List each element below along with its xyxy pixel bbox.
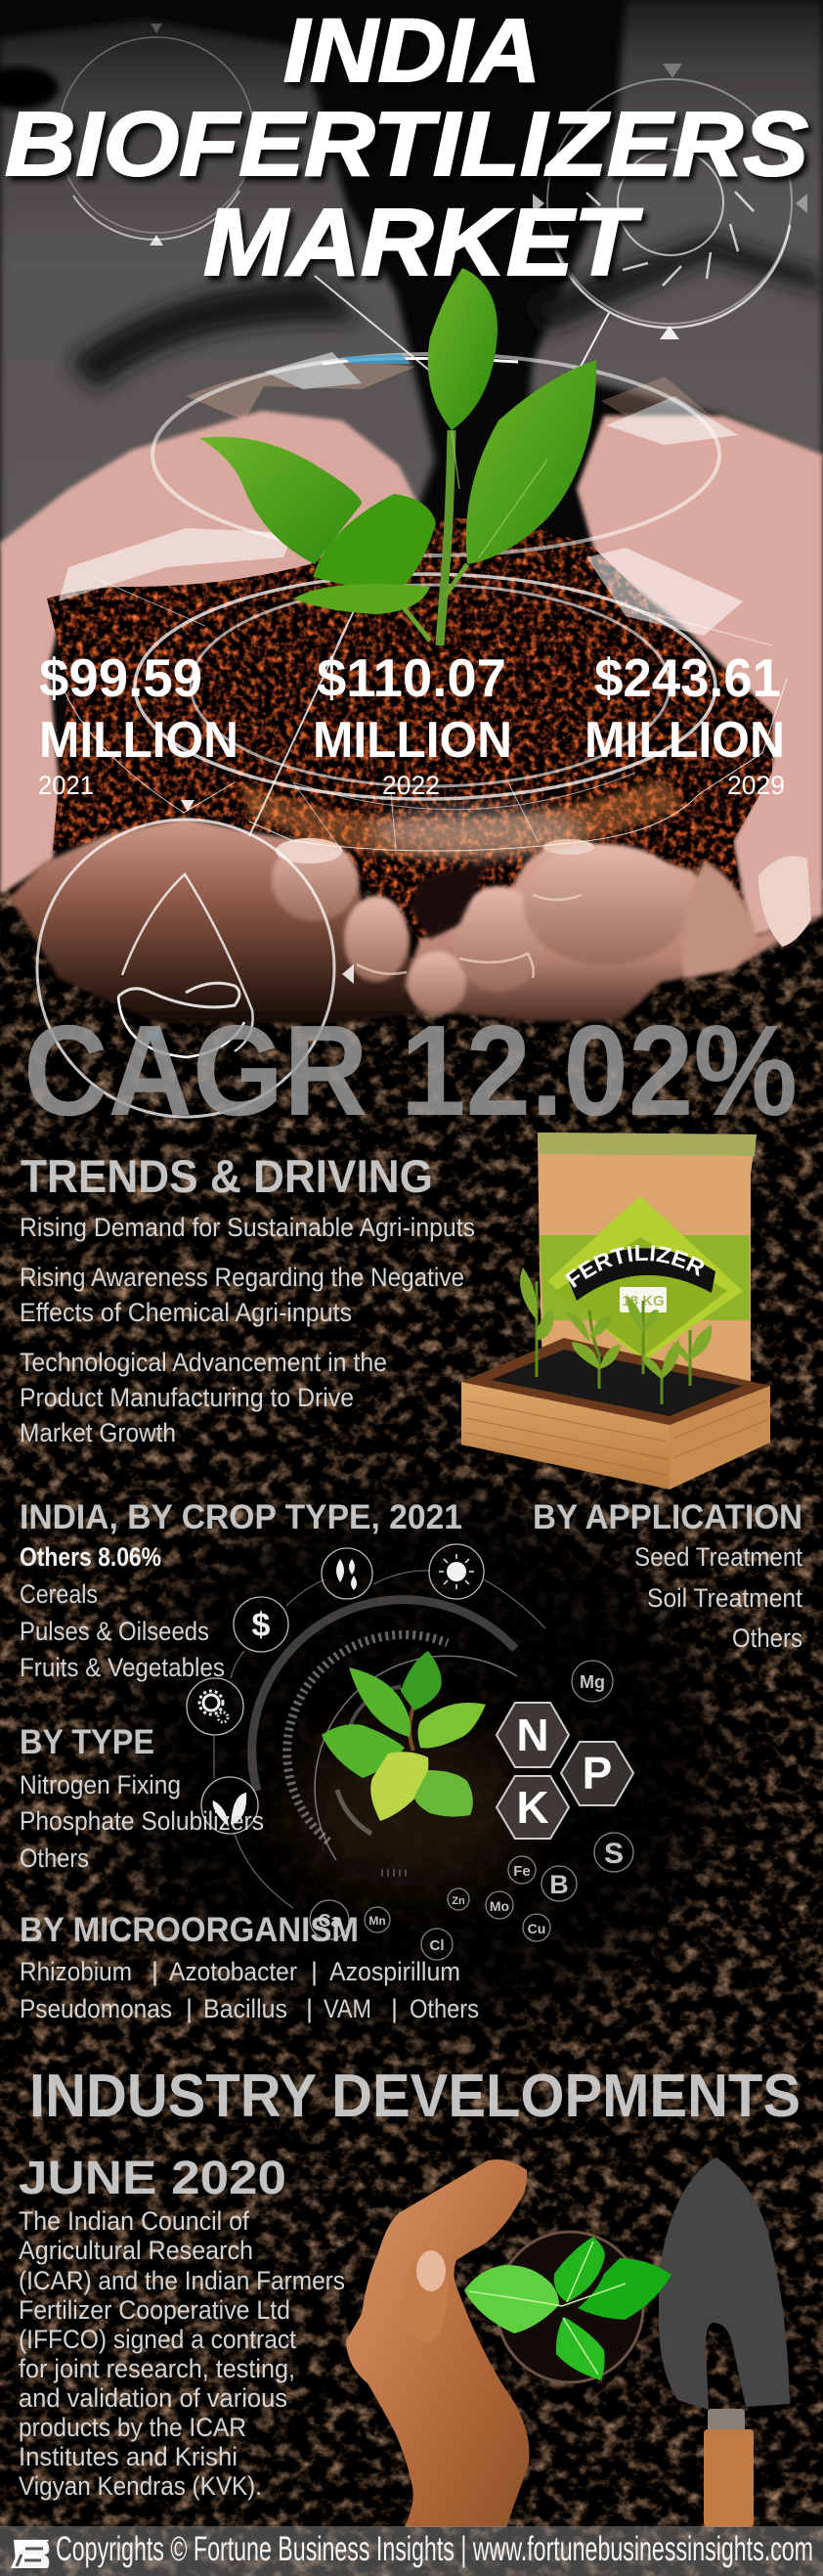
dial rings xyxy=(214,1571,545,1908)
microorganism list: Bacillus xyxy=(203,1994,287,2023)
trace element badges xyxy=(310,1661,633,1960)
trace element badges: Zn xyxy=(452,1895,465,1907)
finger lines xyxy=(357,895,582,978)
stat 2021: MILLION xyxy=(39,712,238,769)
seedling leaves xyxy=(464,2237,671,2380)
weight tag xyxy=(620,1287,667,1312)
description: (ICAR) and the Indian Farmers xyxy=(19,2266,345,2295)
drop circle xyxy=(37,820,334,1117)
panel: by application xyxy=(533,1498,802,1653)
application list xyxy=(634,1542,802,1653)
stat 2029: $243.61 xyxy=(594,647,781,708)
stat 2029: 2029 xyxy=(727,771,785,800)
type list xyxy=(20,1770,264,1873)
description: Institutes and Krishi xyxy=(19,2442,238,2471)
top right circles xyxy=(547,79,792,324)
trends list: Rising Awareness Regarding the Negative xyxy=(20,1263,464,1292)
planter xyxy=(461,1338,770,1425)
left sleeve xyxy=(0,20,435,587)
trace element badges: Fe xyxy=(513,1863,531,1880)
microorganism list: Azotobacter xyxy=(169,1957,297,1986)
title: BIOFERTILIZERS xyxy=(5,93,808,195)
fine polygon band xyxy=(59,675,787,851)
plant xyxy=(322,1651,486,1821)
finger gaps xyxy=(411,861,489,939)
crop list: Cereals xyxy=(20,1579,98,1609)
hand xyxy=(346,2159,529,2527)
trace element badges: Mg xyxy=(580,1672,605,1692)
stat 2021: $99.59 xyxy=(39,647,202,708)
title xyxy=(5,1,808,295)
left palm xyxy=(0,411,430,895)
microorganism list: Pseudomonas xyxy=(20,1994,172,2023)
heading: BY TYPE xyxy=(20,1723,154,1761)
right fist xyxy=(404,839,823,1021)
footer bar xyxy=(0,2526,823,2576)
right palm xyxy=(577,416,823,937)
title: MARKET xyxy=(203,189,643,295)
hexagon K xyxy=(497,1776,569,1839)
cyan soil ellipses xyxy=(135,574,715,799)
icon: logo xyxy=(11,2540,49,2568)
illustration: fertilizer bag and planter: 18 KG xyxy=(622,1293,665,1310)
stat 2021 xyxy=(38,647,238,800)
icon: sun xyxy=(429,1544,484,1599)
hexagon N: N xyxy=(516,1710,549,1760)
description: for joint research, testing, xyxy=(19,2354,295,2383)
icon: water drops xyxy=(322,1548,372,1599)
seedling xyxy=(199,268,596,645)
left leaf xyxy=(199,437,362,564)
hexagon P xyxy=(561,1742,633,1805)
trace element badges: Cl xyxy=(430,1937,444,1954)
bag xyxy=(538,1133,757,1408)
hero photo: hands holding soil xyxy=(0,0,823,1023)
stat 2022: $110.07 xyxy=(317,647,506,708)
stat 2022: MILLION xyxy=(313,712,512,769)
glowing band xyxy=(239,777,684,859)
panel: by microorganism xyxy=(20,1911,479,2023)
market value stats xyxy=(38,647,785,800)
hexagon P: P xyxy=(583,1748,612,1799)
trends list: Market Growth xyxy=(20,1418,176,1447)
trace element badges: Mo xyxy=(490,1898,509,1914)
description: products by the ICAR xyxy=(19,2413,246,2442)
microorganism list: | xyxy=(186,1994,193,2023)
microorganism list: | xyxy=(306,1994,313,2023)
microorganism list: | xyxy=(152,1957,158,1986)
crop list: Others 8.06% xyxy=(20,1542,161,1572)
illustration: fertilizer bag and planter xyxy=(461,1133,770,1489)
title: INDIA xyxy=(283,1,541,101)
panel: by type xyxy=(20,1723,264,1873)
icon: dollar xyxy=(234,1597,288,1652)
lower leaf xyxy=(313,494,436,597)
icon: leaf xyxy=(201,1777,258,1834)
trace element badges: Ca xyxy=(318,1911,341,1931)
description: The Indian Council of xyxy=(19,2206,249,2236)
microorganism list: Others xyxy=(410,1994,479,2023)
blue-tinted main ellipse xyxy=(152,354,719,555)
base leaf xyxy=(293,584,430,614)
hexagon N xyxy=(497,1703,569,1767)
application list: Seed Treatment xyxy=(634,1542,802,1572)
pot xyxy=(497,2232,643,2382)
trace element badges: Mn xyxy=(368,1914,386,1928)
heading: BY MICROORGANISM xyxy=(20,1911,359,1949)
soil mound xyxy=(47,518,772,978)
trends list: Rising Demand for Sustainable Agri-inputs xyxy=(20,1213,475,1242)
sleeve folds xyxy=(68,279,362,391)
stat 2022: 2022 xyxy=(382,771,440,800)
stat 2021: 2021 xyxy=(38,771,94,800)
fingers xyxy=(272,839,758,1014)
microorganism list xyxy=(20,1957,479,2023)
trace element badges: B xyxy=(549,1870,569,1899)
trace element badges: S xyxy=(604,1838,624,1870)
crop list xyxy=(20,1542,225,1682)
left fist xyxy=(10,818,420,1023)
heading: TRENDS & DRIVING xyxy=(21,1150,433,1202)
right leaf xyxy=(466,360,596,564)
panel: soil dial graphic xyxy=(127,1496,714,2024)
heading: INDIA, BY CROP TYPE, 2021 xyxy=(20,1498,462,1536)
HUD overlay rings and patches xyxy=(37,23,807,1117)
icon: gears xyxy=(187,1678,243,1735)
type list: Nitrogen Fixing xyxy=(20,1770,181,1799)
description: Fertilizer Cooperative Ltd xyxy=(19,2295,290,2325)
heading: BY APPLICATION xyxy=(533,1498,802,1536)
date: JUNE 2020 xyxy=(19,2153,286,2204)
hexagon K: K xyxy=(516,1782,549,1833)
panel: by crop type xyxy=(20,1498,462,1682)
trace element badges: Cu xyxy=(528,1921,545,1936)
type list: Phosphate Solubilizers xyxy=(20,1806,264,1836)
trends list: Effects of Chemical Agri-inputs xyxy=(20,1298,352,1327)
description: Vigyan Kendras (KVK). xyxy=(19,2471,262,2501)
trowel xyxy=(659,2157,790,2410)
right sleeve xyxy=(528,0,823,460)
panel: industry developments xyxy=(19,2063,801,2501)
icon: dollar: $ xyxy=(252,1607,271,1644)
description: (IFFCO) signed a contract xyxy=(19,2325,296,2354)
application list: Soil Treatment xyxy=(647,1583,802,1613)
microorganism list: Rhizobium xyxy=(20,1957,132,1986)
microorganism list: VAM xyxy=(324,1994,371,2023)
description: and validation of various xyxy=(19,2383,287,2413)
trends list: Technological Advancement in the xyxy=(20,1348,387,1377)
trends list xyxy=(20,1213,475,1447)
stat 2029: MILLION xyxy=(585,712,785,769)
stem xyxy=(440,430,452,645)
microorganism list: Azospirillum xyxy=(329,1957,460,1986)
dark backdrop xyxy=(127,1496,714,2024)
finger nails xyxy=(276,838,811,947)
microorganism list: | xyxy=(311,1957,318,1986)
trends list: Product Manufacturing to Drive xyxy=(20,1383,354,1412)
panel: trends and driving xyxy=(20,1150,475,1447)
microorganism list: | xyxy=(391,1994,398,2023)
crop list: Fruits & Vegetables xyxy=(20,1653,225,1682)
sprouts xyxy=(537,1281,690,1404)
crop list: Pulses & Oilseeds xyxy=(20,1617,209,1646)
application list: Others xyxy=(732,1623,802,1653)
illustration: hand protecting seedling and trowel xyxy=(346,2157,790,2527)
top leaf xyxy=(428,268,498,430)
description xyxy=(19,2206,345,2501)
stat 2029 xyxy=(585,647,785,800)
fertilizer label: FERTILIZER xyxy=(565,1245,704,1288)
connector lines xyxy=(315,276,459,395)
stat 2022 xyxy=(313,647,512,800)
type list: Others xyxy=(20,1843,89,1873)
top left circle xyxy=(59,37,254,233)
description: Agricultural Research xyxy=(19,2236,253,2265)
translucent panels xyxy=(59,352,743,636)
